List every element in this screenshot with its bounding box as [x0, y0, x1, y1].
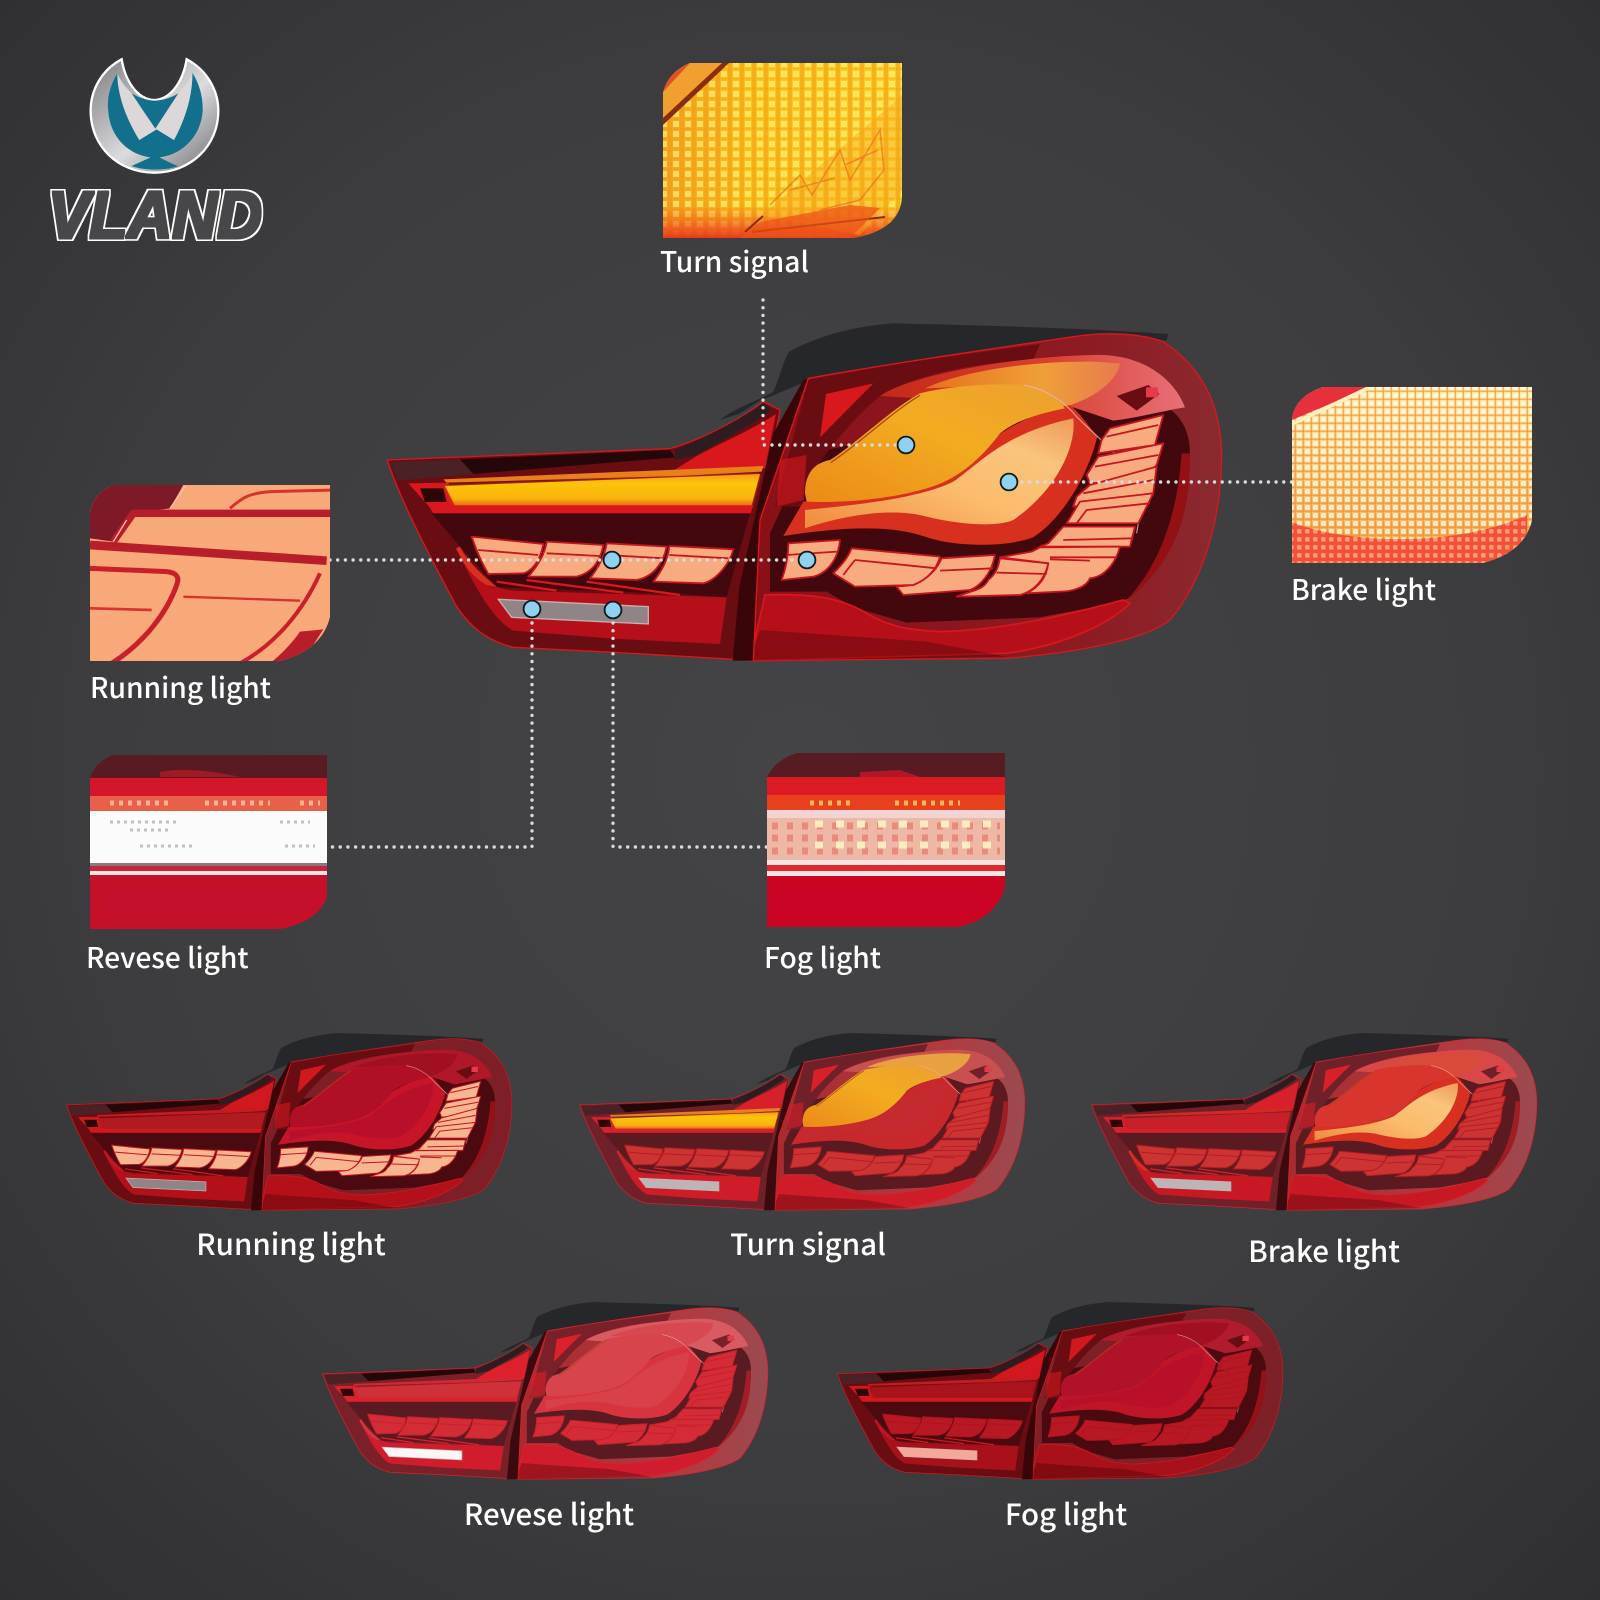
connector lines — [330, 300, 1292, 847]
lamp: turn signal state — [580, 1033, 1025, 1264]
fog light label: Fog light — [764, 936, 881, 977]
marker dots — [524, 437, 1017, 618]
panel: reverse light detail — [86, 755, 327, 977]
lamp: running light state — [67, 1033, 512, 1264]
turn signal caption: Turn signal — [730, 1222, 886, 1264]
panel: running light detail — [90, 485, 333, 707]
running light lamp — [67, 1033, 512, 1210]
fog light close-up — [767, 753, 1006, 927]
running light label: Running light — [90, 666, 271, 707]
logo wordmark: VLAND — [48, 178, 262, 253]
lamp: reverse light state — [323, 1302, 768, 1534]
reverse light label: Revese light — [86, 936, 249, 977]
brake light close-up — [1292, 387, 1532, 563]
panel: turn signal detail — [650, 63, 902, 281]
turn signal lamp — [580, 1033, 1025, 1210]
logo emblem — [91, 59, 218, 173]
turn signal label: Turn signal — [660, 240, 809, 281]
brake light label: Brake light — [1291, 568, 1436, 609]
brake light lamp — [1092, 1033, 1537, 1210]
panel: fog light detail — [764, 753, 1006, 977]
running light close-up — [90, 485, 333, 663]
turn signal close-up — [650, 63, 902, 238]
reverse light close-up — [90, 755, 327, 929]
running light caption: Running light — [196, 1222, 386, 1264]
brake light caption: Brake light — [1248, 1229, 1400, 1271]
lamp: fog light state — [838, 1302, 1283, 1534]
main tail light: all functions lit — [387, 323, 1222, 661]
reverse light lamp — [323, 1302, 768, 1479]
panel: brake light detail — [1291, 387, 1532, 609]
reverse light caption: Revese light — [464, 1492, 634, 1534]
lamp: brake light state — [1092, 1033, 1537, 1271]
fog light caption: Fog light — [1005, 1492, 1127, 1534]
logo: VLAND — [48, 59, 262, 253]
fog light lamp — [838, 1302, 1283, 1479]
